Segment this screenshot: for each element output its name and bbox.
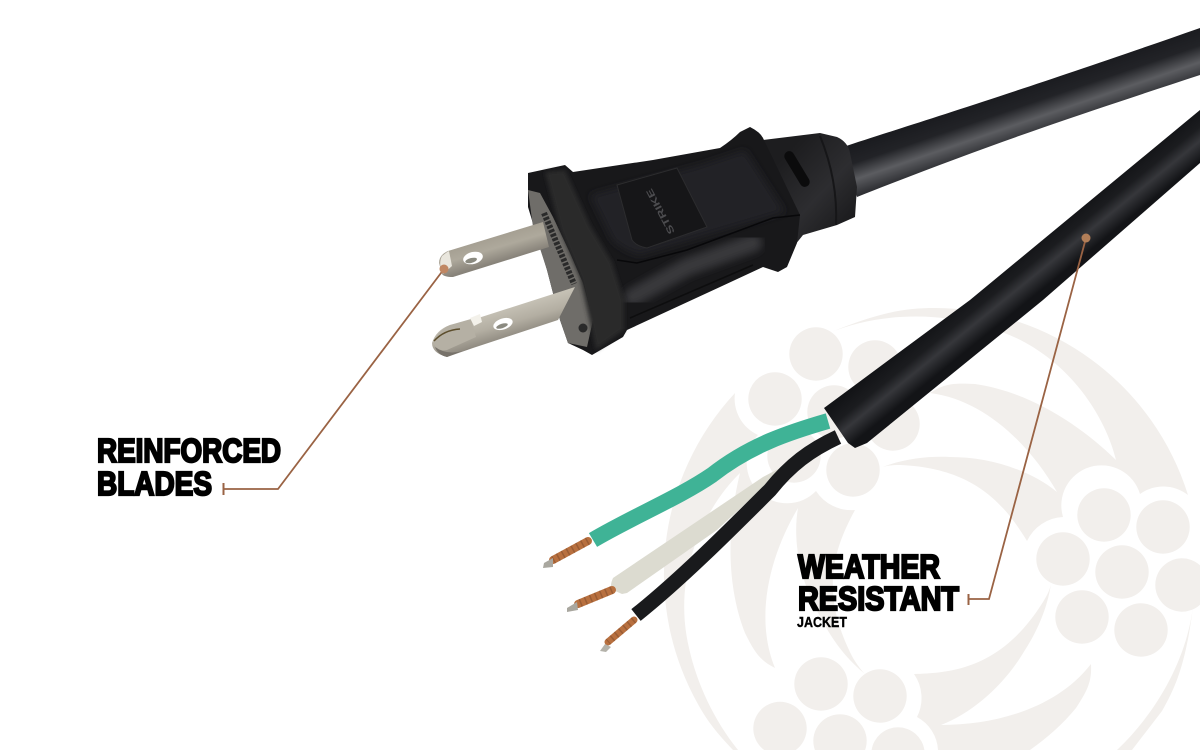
label: weather resistant jacket: WEATHER	[798, 549, 940, 586]
plug face mark	[578, 324, 588, 332]
plug face lettering	[544, 213, 574, 284]
collar edge	[820, 136, 836, 225]
callout leader: reinforced blades	[224, 264, 448, 495]
swirl arm: right	[829, 308, 1200, 657]
body ridge	[617, 215, 800, 263]
stripped cable	[543, 110, 1200, 652]
plug cable	[843, 28, 1200, 197]
white wire	[611, 468, 780, 594]
label: weather resistant jacket: JACKET	[797, 614, 847, 631]
lower body highlight	[633, 243, 753, 297]
strain relief collar	[763, 133, 857, 245]
silver tip: green	[543, 558, 553, 568]
callout leader: weather resistant	[968, 234, 1090, 605]
outer jacket	[824, 110, 1200, 448]
recessed label panel	[617, 168, 707, 248]
label: reinforced blades: BLADES	[97, 466, 212, 503]
plug	[432, 127, 857, 357]
copper strand: white	[578, 590, 612, 604]
copper strand: green	[553, 541, 588, 560]
collar slot	[782, 149, 812, 189]
label: reinforced blades	[97, 433, 281, 503]
black wire	[636, 437, 838, 615]
top blade	[439, 222, 549, 277]
lower body shadow line	[630, 265, 753, 318]
background emblem: triskelion swirl	[664, 308, 1200, 750]
plug face	[528, 190, 593, 347]
silver tip: white	[567, 602, 578, 612]
brand text on panel: STRIKE	[644, 186, 678, 236]
label: reinforced blades: REINFORCED	[97, 433, 281, 470]
silver tip: black	[600, 644, 611, 652]
copper strand: black	[608, 620, 634, 642]
upper body highlight	[590, 150, 785, 255]
flange highlight	[545, 170, 624, 350]
swirl arm: top left	[664, 327, 920, 750]
green wire	[593, 421, 828, 540]
swirl arm: bottom	[753, 584, 1193, 750]
label: weather resistant jacket	[797, 549, 959, 631]
plug body	[528, 127, 800, 355]
bottom blade	[432, 287, 575, 357]
label: weather resistant jacket: RESISTANT	[798, 581, 959, 618]
